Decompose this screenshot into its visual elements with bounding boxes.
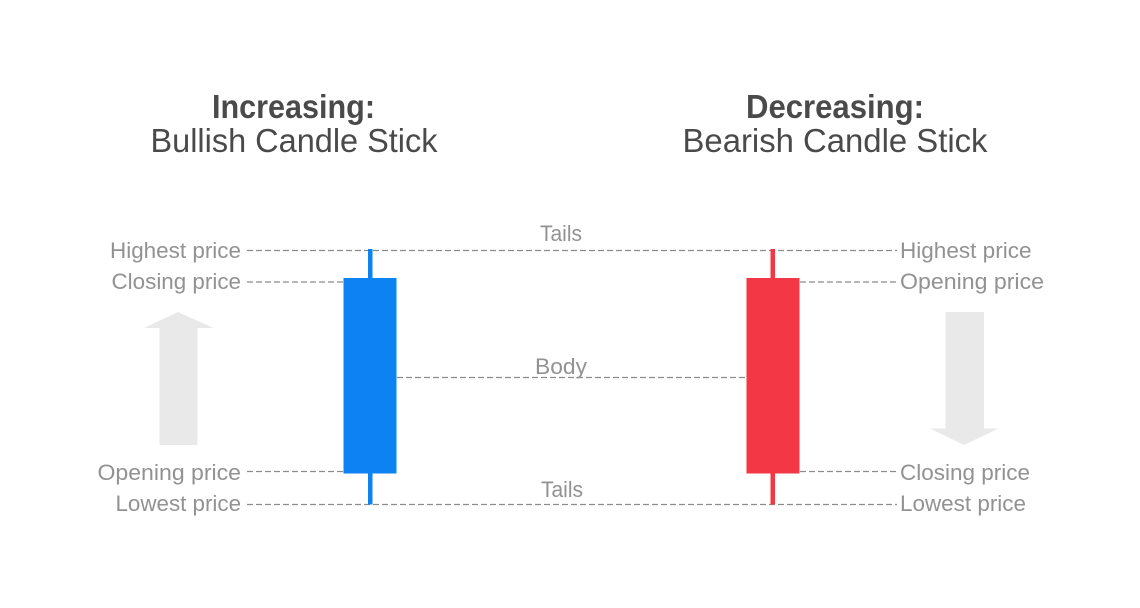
left price labels: Closing price — [112, 269, 241, 294]
heading: decreasing bearish — [682, 88, 988, 159]
right price labels: Lowest price — [900, 491, 1026, 516]
right price labels: Opening price — [900, 269, 1044, 294]
right price labels — [900, 238, 1044, 516]
bullish candle — [344, 249, 396, 504]
icon: up arrow — [144, 312, 214, 445]
heading: increasing bullish: Increasing: — [212, 88, 375, 125]
center labels: tails and body: Tails — [540, 221, 582, 246]
left price labels: Lowest price — [116, 491, 241, 516]
heading: increasing bullish — [150, 88, 438, 159]
heading: decreasing bearish: Decreasing: — [746, 88, 924, 125]
heading: decreasing bearish: Bearish Candle Stick — [682, 122, 988, 159]
bearish candle — [746, 249, 800, 504]
right price labels: Closing price — [900, 460, 1030, 485]
center labels: tails and body — [535, 221, 588, 502]
center labels: tails and body: Tails — [541, 477, 583, 502]
right price labels: Highest price — [900, 238, 1032, 263]
left price labels: Opening price — [98, 460, 241, 485]
heading: increasing bullish: Bullish Candle Stick — [150, 122, 438, 159]
left price labels — [98, 238, 241, 516]
center labels: tails and body: Body — [535, 354, 588, 379]
icon: down arrow — [930, 312, 998, 445]
left price labels: Highest price — [110, 238, 241, 263]
